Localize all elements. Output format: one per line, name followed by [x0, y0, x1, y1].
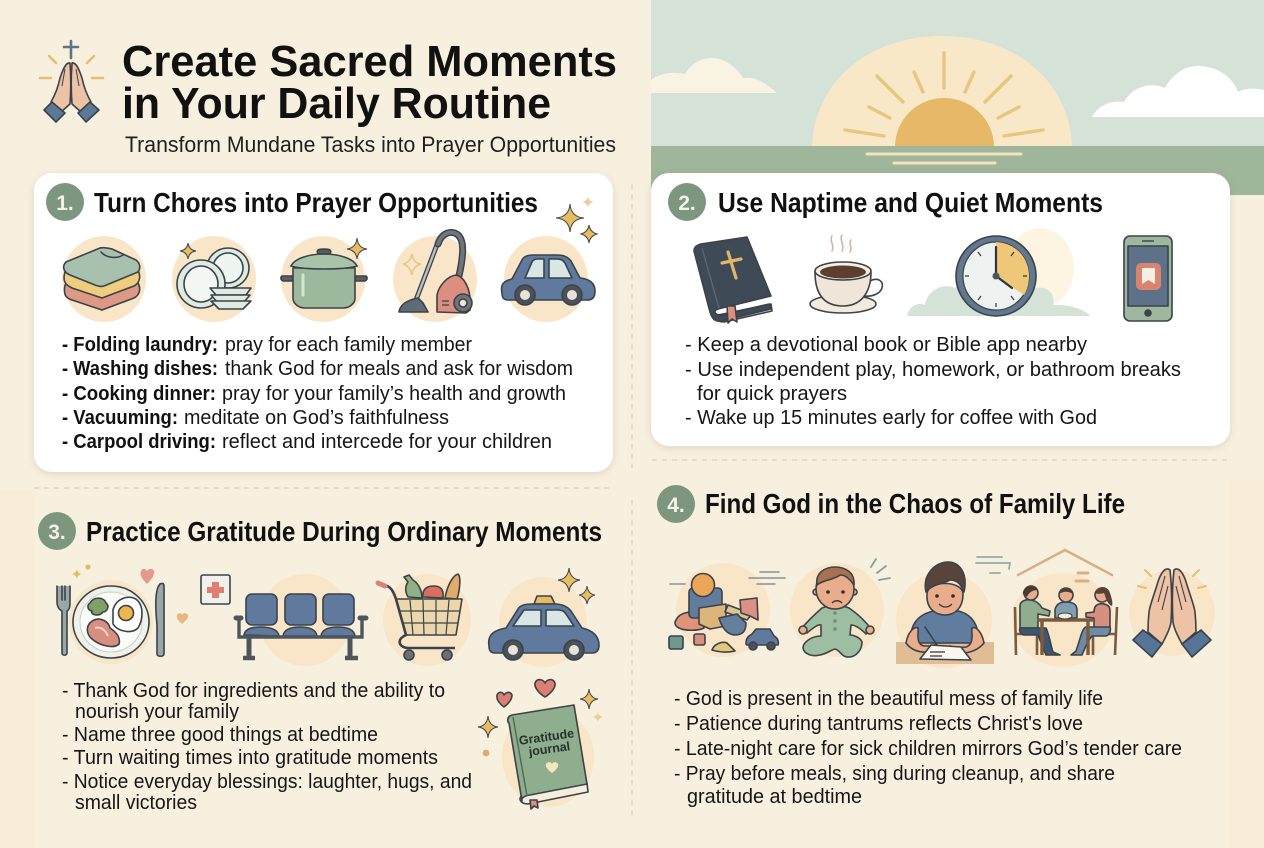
- badge 4: [657, 485, 695, 523]
- list: chaos: - God is present in the beautiful mess of family life: [674, 688, 1103, 710]
- icon: toys: [669, 563, 785, 657]
- title: Create Sacred Moments: [122, 37, 617, 86]
- icon: phone: [1124, 236, 1172, 321]
- badge 1: [46, 183, 84, 221]
- icon: child doing homework: [896, 557, 1010, 668]
- icon: waiting room chairs: [236, 574, 366, 666]
- list: chores: - Folding laundry:: [62, 334, 218, 356]
- icon: car: [501, 236, 595, 322]
- heading 2: Use Naptime and Quiet Moments: [718, 187, 1103, 218]
- badge 3: 3.: [48, 521, 66, 544]
- list: chores: - Carpool driving:: [62, 431, 216, 453]
- list: chores: - Vacuuming:: [62, 407, 178, 429]
- list: naptime: - Wake up 15 minutes early for coffee with God: [685, 407, 1097, 429]
- title: in Your Daily Routine: [122, 79, 551, 128]
- icon: praying hands: [1129, 569, 1215, 657]
- icon: shopping cart: [378, 574, 471, 666]
- list: gratitude: nourish your family: [75, 701, 239, 723]
- icon: coffee cup: [810, 235, 882, 313]
- badge 4: 4.: [667, 494, 685, 517]
- table: [1037, 620, 1093, 655]
- heading 3: Practice Gratitude During Ordinary Moments: [86, 516, 602, 547]
- list: chaos: - Late-night care for sick children mirrors God’s tender care: [674, 738, 1182, 760]
- list: gratitude: - Notice everyday blessings: laughter, hugs, and: [62, 771, 472, 793]
- list: chores: - Washing dishes:: [62, 358, 218, 380]
- list: chores: pray for your family’s health and growth: [222, 383, 566, 405]
- chairs: [1015, 607, 1117, 655]
- list: chaos: - Patience during tantrums reflects Christ's love: [674, 713, 1083, 735]
- icon: baby: [790, 559, 890, 657]
- list: naptime: - Use independent play, homework, or bathroom breaks: [685, 359, 1181, 381]
- list: chaos: [674, 688, 1182, 808]
- list: gratitude: [62, 680, 472, 814]
- panel: section 1 chores: [34, 173, 613, 472]
- subtitle: Transform Mundane Tasks into Prayer Opportunities: [125, 132, 616, 157]
- cloud left: [651, 58, 777, 93]
- icon: gratitude journal: [478, 680, 603, 809]
- badge 2: [668, 183, 706, 221]
- title: [122, 37, 617, 128]
- icon: gratitude journal: Gratitude: [518, 726, 575, 748]
- icon: bible: [694, 237, 772, 323]
- badge 3: [38, 512, 76, 550]
- sunrise scene: [651, 0, 1264, 195]
- panel: section 2 naptime: [651, 173, 1230, 446]
- badge 2: 2.: [678, 192, 696, 215]
- list: naptime: [685, 334, 1181, 429]
- list: gratitude: small victories: [75, 792, 197, 814]
- icon: medical sign: [201, 575, 230, 604]
- list: gratitude: - Turn waiting times into gratitude moments: [62, 747, 438, 769]
- cloud right: [1092, 66, 1264, 117]
- list: gratitude: - Name three good things at bedtime: [62, 724, 378, 746]
- list: chores: meditate on God’s faithfulness: [184, 407, 449, 429]
- heading 1: Turn Chores into Prayer Opportunities: [94, 187, 538, 218]
- list: chaos: - Pray before meals, sing during cleanup, and share: [674, 763, 1115, 785]
- heading 4: Find God in the Chaos of Family Life: [705, 488, 1125, 519]
- icon: vacuum cleaner: [393, 232, 477, 322]
- panel: section 3 gratitude: [38, 512, 603, 814]
- icon: family at table: [1012, 550, 1117, 667]
- list: chores: reflect and intercede for your children: [222, 431, 552, 453]
- icon: gratitude journal: journal: [527, 739, 571, 759]
- icon: cooking pot: [281, 236, 367, 322]
- icon: dishes: [172, 236, 256, 322]
- list: gratitude: - Thank God for ingredients and the ability to: [62, 680, 445, 702]
- list: chores: pray for each family member: [225, 334, 472, 356]
- badge 1: 1.: [56, 192, 74, 215]
- list: chores: - Cooking dinner:: [62, 383, 216, 405]
- icon: meal plate: [57, 564, 188, 664]
- panel: section 4 chaos: [657, 485, 1215, 808]
- list: naptime: for quick prayers: [697, 383, 847, 405]
- list: naptime: - Keep a devotional book or Bible app nearby: [685, 334, 1087, 356]
- icon: taxi: [489, 568, 599, 667]
- icon: clock with cloud: [907, 228, 1090, 316]
- header icon: praying hands with cross: [40, 41, 103, 122]
- icon: folded laundry: [62, 236, 146, 322]
- list: chores: thank God for meals and ask for wisdom: [225, 358, 573, 380]
- icon: sparkles: [556, 196, 597, 243]
- list: chores: [62, 334, 573, 453]
- list: chaos: gratitude at bedtime: [687, 786, 862, 808]
